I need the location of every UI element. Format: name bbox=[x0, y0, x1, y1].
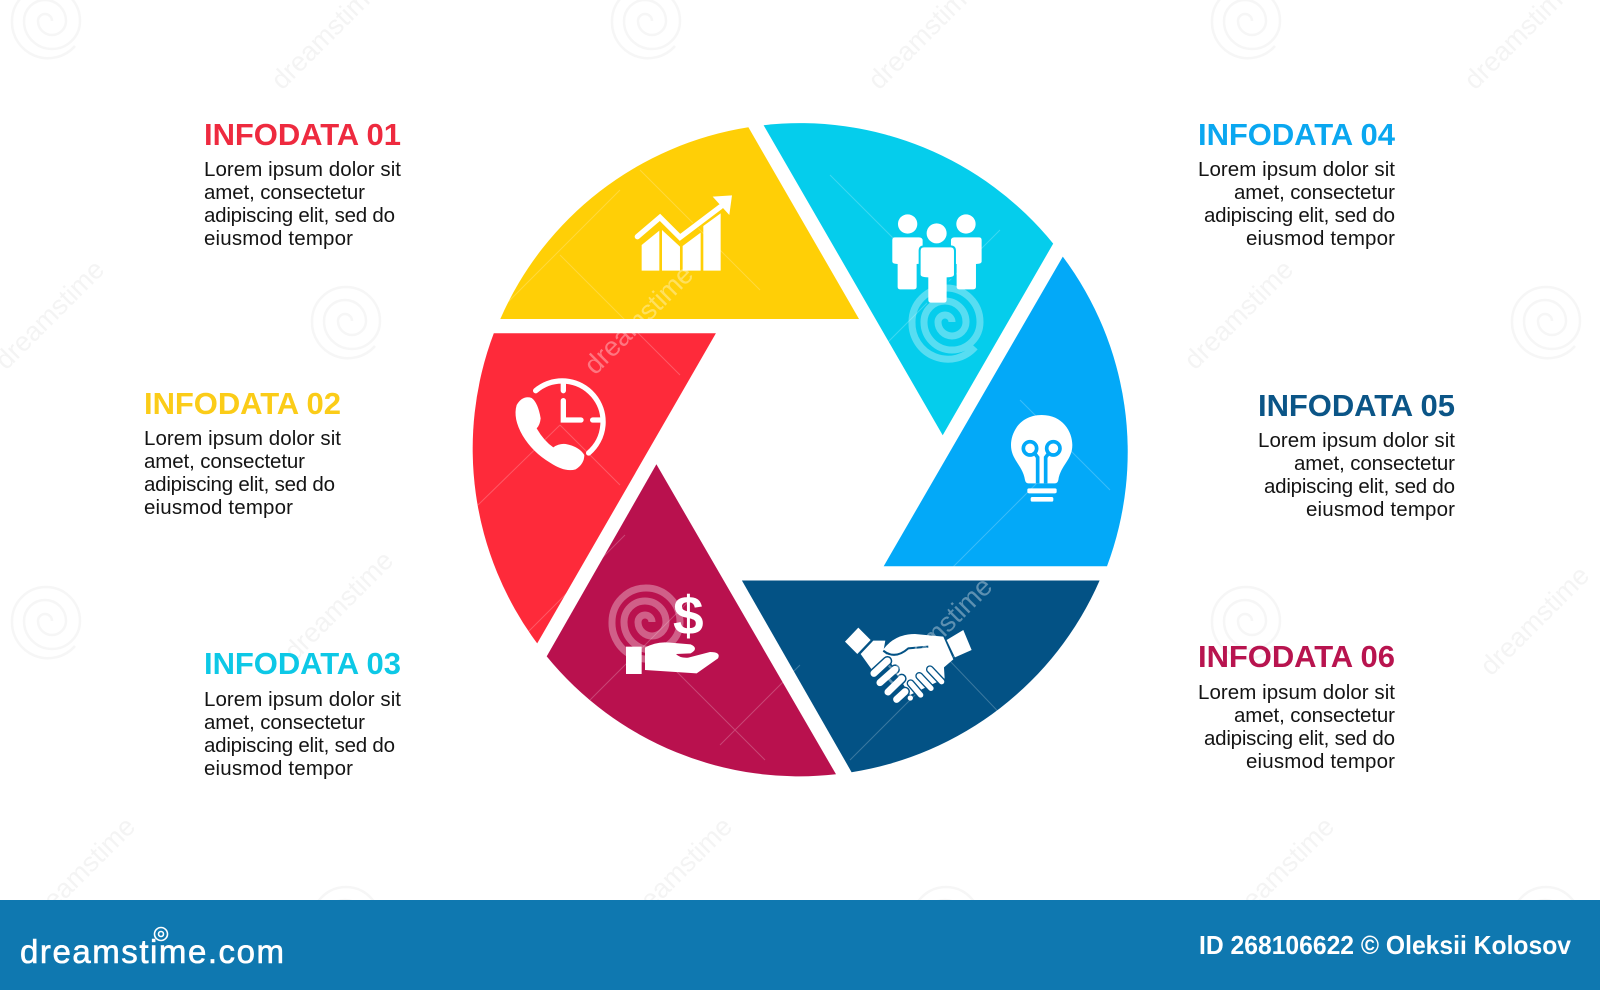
text block: INFODATA 06: adipiscing elit, sed do bbox=[1204, 727, 1395, 750]
text block: INFODATA 01: eiusmod tempor bbox=[204, 227, 353, 250]
text block: INFODATA 02: adipiscing elit, sed do bbox=[144, 473, 335, 496]
text block: INFODATA 05 bbox=[1258, 388, 1455, 521]
text block: INFODATA 02: eiusmod tempor bbox=[144, 496, 293, 519]
segment 05: crimson blade bbox=[547, 464, 836, 776]
text block: INFODATA 06: Lorem ipsum dolor sit bbox=[1198, 681, 1395, 704]
shutter circle diagram: dreamstime bbox=[877, 571, 998, 692]
icon: hand holding dollar: $ bbox=[673, 584, 704, 646]
text block: INFODATA 03 bbox=[204, 646, 401, 780]
text block: INFODATA 02: INFODATA 02 bbox=[144, 386, 341, 421]
text block: INFODATA 03: eiusmod tempor bbox=[204, 757, 353, 780]
text block: INFODATA 03: Lorem ipsum dolor sit bbox=[204, 688, 401, 711]
text: dreamstime bbox=[1219, 811, 1340, 932]
segment 06: red blade bbox=[473, 333, 716, 643]
text block: INFODATA 05: amet, consectetur bbox=[1294, 452, 1455, 475]
footer band bbox=[0, 900, 1600, 990]
text block: INFODATA 06: INFODATA 06 bbox=[1198, 639, 1395, 674]
text block: INFODATA 04: eiusmod tempor bbox=[1246, 227, 1395, 250]
text block: INFODATA 04: adipiscing elit, sed do bbox=[1204, 204, 1395, 227]
icon: hand holding dollar bbox=[626, 584, 719, 674]
text block: INFODATA 02 bbox=[144, 386, 341, 519]
text block: INFODATA 06: eiusmod tempor bbox=[1246, 750, 1395, 773]
text block: INFODATA 04: Lorem ipsum dolor sit bbox=[1198, 158, 1395, 181]
text block: INFODATA 01: amet, consectetur bbox=[204, 181, 365, 204]
text block: INFODATA 03: amet, consectetur bbox=[204, 711, 365, 734]
text block: INFODATA 05: adipiscing elit, sed do bbox=[1264, 475, 1455, 498]
text block: INFODATA 02: amet, consectetur bbox=[144, 450, 305, 473]
icon: phone with clock bbox=[516, 381, 603, 470]
text block: INFODATA 01: Lorem ipsum dolor sit bbox=[204, 158, 401, 181]
text: dreamstime bbox=[1178, 254, 1299, 375]
footer credit: ID 268106622 © Oleksii Kolosov bbox=[1199, 930, 1572, 960]
text block: INFODATA 04: amet, consectetur bbox=[1234, 181, 1395, 204]
text block: INFODATA 04: INFODATA 04 bbox=[1198, 117, 1396, 152]
icon: light bulb bbox=[1011, 415, 1072, 502]
icon: team of three people bbox=[892, 214, 982, 303]
footer logo: dreamstime.com bbox=[20, 933, 284, 970]
shutter circle diagram bbox=[473, 123, 1128, 776]
segment 01: yellow blade bbox=[500, 127, 859, 319]
text block: INFODATA 01: INFODATA 01 bbox=[204, 117, 401, 152]
text: dreamstime bbox=[20, 811, 141, 932]
segment 03: blue blade bbox=[884, 257, 1128, 566]
text block: INFODATA 05: INFODATA 05 bbox=[1258, 388, 1455, 423]
segment 02: cyan blade bbox=[764, 123, 1053, 435]
text: dreamstime bbox=[1474, 560, 1595, 681]
text block: INFODATA 03: INFODATA 03 bbox=[204, 646, 401, 681]
icon: handshake bbox=[845, 628, 972, 701]
text block: INFODATA 06: amet, consectetur bbox=[1234, 704, 1395, 727]
text block: INFODATA 05: eiusmod tempor bbox=[1306, 498, 1455, 521]
shutter circle diagram: dreamstime bbox=[578, 259, 699, 380]
text: dreamstime bbox=[278, 545, 399, 666]
text: dreamstime bbox=[617, 811, 738, 932]
text block: INFODATA 01 bbox=[204, 117, 401, 250]
text block: INFODATA 04 bbox=[1198, 117, 1396, 250]
text block: INFODATA 02: Lorem ipsum dolor sit bbox=[144, 427, 341, 450]
text block: INFODATA 05: Lorem ipsum dolor sit bbox=[1258, 429, 1455, 452]
icon: growth chart with arrow bbox=[637, 195, 732, 271]
segment 04: navy blade bbox=[742, 580, 1100, 772]
text block: INFODATA 06 bbox=[1198, 639, 1395, 773]
text block: INFODATA 03: adipiscing elit, sed do bbox=[204, 734, 395, 757]
text block: INFODATA 01: adipiscing elit, sed do bbox=[204, 204, 395, 227]
